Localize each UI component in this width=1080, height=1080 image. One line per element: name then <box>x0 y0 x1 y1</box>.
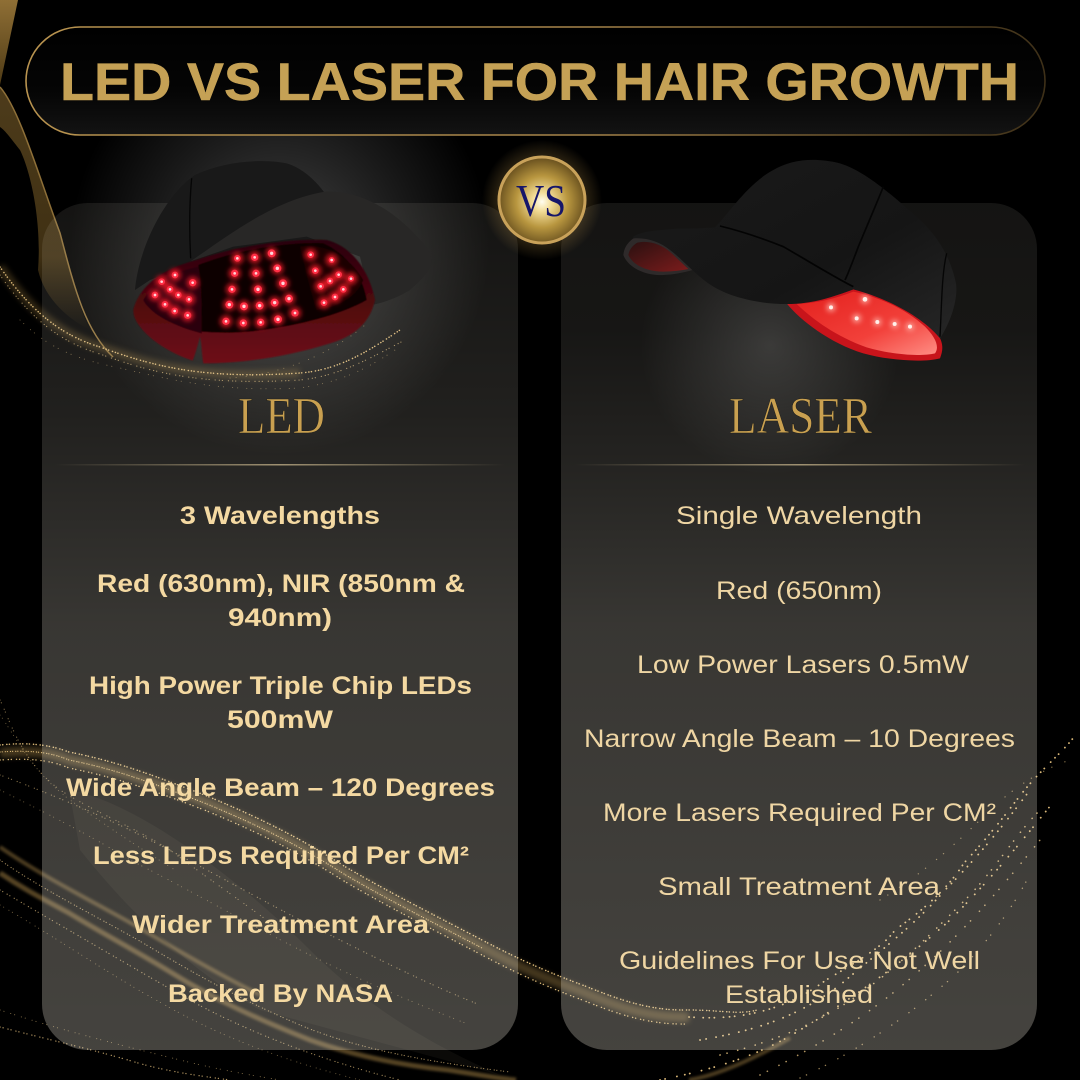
LED points <box>152 249 354 327</box>
column: LED <box>55 388 505 1008</box>
divider <box>55 464 505 466</box>
list: LED features <box>66 502 495 1008</box>
panel background: LED <box>42 203 518 1050</box>
heading: LED: LED <box>238 388 325 445</box>
icon: laser cap <box>623 160 956 361</box>
column: laser <box>575 388 1025 1009</box>
list: laser features: More Lasers Required Per CM² <box>603 799 996 827</box>
list: LED features: High Power Triple Chip LEDs <box>89 672 472 700</box>
list: LED features: 500mW <box>227 706 333 734</box>
list: laser features: Small Treatment Area <box>658 873 940 901</box>
LED hot centres <box>154 252 352 324</box>
VS label: VS <box>516 176 566 226</box>
list: laser features: Narrow Angle Beam – 10 Degrees <box>584 725 1015 753</box>
list: LED features: Less LEDs Required Per CM² <box>93 842 469 870</box>
icon: LED cap <box>133 161 431 363</box>
hat glow: LED <box>60 30 500 460</box>
list: laser features: Low Power Lasers 0.5mW <box>637 651 969 679</box>
heading: LASER: LASER <box>729 388 872 445</box>
title: LED VS LASER FOR HAIR GROWTH <box>60 53 1019 112</box>
panel background: laser <box>561 203 1037 1050</box>
list: LED features: 940nm) <box>228 604 332 632</box>
list: laser features: Red (650nm) <box>716 577 882 605</box>
list: LED features: Backed By NASA <box>168 980 393 1008</box>
list: laser features: Single Wavelength <box>676 502 922 530</box>
list: laser features <box>584 502 1015 1009</box>
list: LED features: Red (630nm), NIR (850nm & <box>97 570 465 598</box>
list: LED features: Wide Angle Beam – 120 Degrees <box>66 774 495 802</box>
list: laser features: Established <box>725 981 873 1009</box>
list: LED features: 3 Wavelengths <box>180 502 380 530</box>
hat glow: laser <box>630 210 910 480</box>
gold particle waves, lower right <box>660 737 1074 1080</box>
divider <box>575 464 1025 466</box>
title pill <box>26 27 1045 135</box>
gold particle waves, top left <box>0 0 405 389</box>
LED halos <box>149 248 357 329</box>
VS badge <box>482 140 602 260</box>
list: LED features: Wider Treatment Area <box>132 911 430 939</box>
list: laser features: Guidelines For Use Not Well <box>619 947 980 975</box>
gold particle waves, lower band <box>0 700 757 1080</box>
